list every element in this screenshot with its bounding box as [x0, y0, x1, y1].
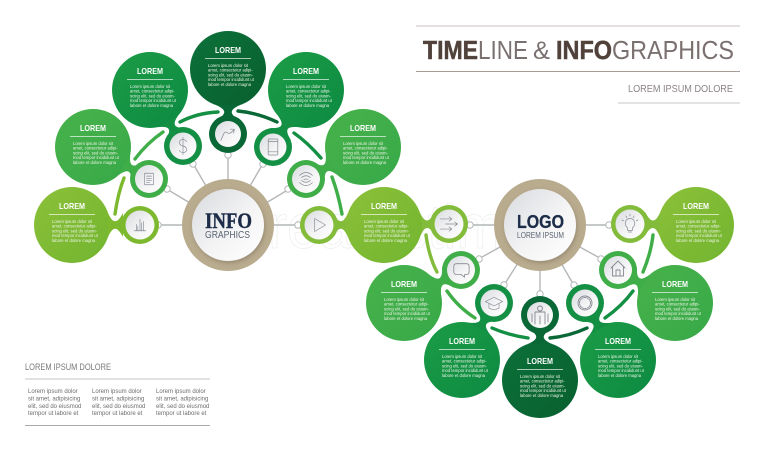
panel: left step 5 — [254, 52, 344, 166]
text block: left step 3: LOREM — [137, 66, 163, 76]
text block: left step 2: Lorem ipsum dolor sit — [73, 141, 114, 146]
text block: left step 1: scing elit, sed do eiusm- — [52, 228, 98, 233]
text block: right step 2: LOREM — [391, 279, 417, 289]
text block: bottom notes: sit amet, adipisicing — [156, 396, 208, 402]
panel: left step 6 — [287, 109, 401, 198]
text block: right step 7: LOREM — [683, 201, 709, 211]
text block: centre step 7: mod tempor incididunt ut — [364, 233, 411, 238]
text block: centre step 7: LOREM — [371, 201, 397, 211]
panel: right step 6 — [599, 251, 713, 341]
text block: right step 2: scing elit, sed do eiusm- — [384, 306, 430, 311]
text block: left step 5: labore et dolore magna — [286, 103, 330, 108]
icon: bar chart — [134, 219, 146, 231]
title: & — [533, 37, 550, 65]
text block: right step 2: labore et dolore magna — [384, 316, 428, 321]
text block: left step 1: mod tempor incididunt ut — [52, 233, 99, 238]
text block: centre step 7: labore et dolore magna — [364, 238, 408, 243]
text block: left step 3: labore et dolore magna — [130, 103, 174, 108]
text block: bottom notes: elit, sed do eiusmod — [28, 404, 81, 410]
text block: right step 6 — [652, 279, 702, 321]
panel: right step 2 — [366, 251, 480, 341]
text block: right step 7: Lorem ipsum dolor sit — [676, 219, 717, 224]
text block: left step 1 — [49, 201, 99, 243]
text block: right step 5: LOREM — [605, 336, 631, 346]
text block: right step 5: scing elit, sed do eiusm- — [598, 363, 644, 368]
text block: left step 5: LOREM — [293, 66, 319, 76]
hub: logo: LOREM IPSUM — [517, 231, 564, 240]
text block: right step 7 — [673, 201, 723, 243]
text block: right step 5: amet, consectetur adipi- — [598, 359, 643, 364]
text block: left step 6 — [340, 123, 390, 165]
text block: left step 2 — [70, 123, 120, 165]
text block: right step 4: LOREM — [527, 356, 553, 366]
text block: left step 4: labore et dolore magna — [208, 82, 252, 87]
text block: right step 2: Lorem ipsum dolor sit — [384, 297, 425, 302]
text block: left step 2: scing elit, sed do eiusm- — [73, 150, 119, 155]
text block: centre step 7: Lorem ipsum dolor sit — [364, 219, 405, 224]
text block: right step 7: amet, consectetur adipi- — [676, 224, 721, 229]
text block: right step 5: mod tempor incididunt ut — [598, 368, 645, 373]
title: LINE — [478, 35, 528, 65]
text block: left step 1: Lorem ipsum dolor sit — [52, 219, 93, 224]
text block: right step 6: Lorem ipsum dolor sit — [655, 297, 696, 302]
text block: right step 6: LOREM — [662, 279, 688, 289]
icon: smartphone — [268, 139, 278, 155]
text block: right step 3: amet, consectetur adipi- — [442, 359, 487, 364]
connector lines: info hub — [155, 152, 301, 228]
text block: right step 5: Lorem ipsum dolor sit — [598, 354, 639, 359]
text block: left step 6: labore et dolore magna — [343, 160, 387, 165]
hub: logo — [494, 179, 586, 271]
text block: bottom notes: sit amet, adipisicing — [28, 396, 80, 402]
text block: left step 5: scing elit, sed do eiusm- — [286, 93, 332, 98]
text block: bottom notes: tempor ut labore et — [156, 411, 207, 417]
text block: right step 4: scing elit, sed do eiusm- — [520, 383, 566, 388]
text block: left step 4: Lorem ipsum dolor sit — [208, 63, 249, 68]
title — [416, 26, 740, 72]
text block: left step 3: amet, consectetur adipi- — [130, 89, 175, 94]
text block: left step 2: LOREM — [80, 123, 106, 133]
icon: document — [145, 173, 153, 185]
text block: left step 6: mod tempor incididunt ut — [343, 155, 390, 160]
text block: left step 3: Lorem ipsum dolor sit — [130, 84, 171, 89]
text block: right step 6: amet, consectetur adipi- — [655, 302, 700, 307]
panel: centre step 7 — [300, 187, 468, 263]
text block: bottom notes: Lorem ipsum dolor — [156, 389, 206, 395]
text block: bottom notes: elit, sed do eiusmod — [156, 404, 209, 410]
text block: right step 4: Lorem ipsum dolor sit — [520, 374, 561, 379]
arcs: curved links between steps — [115, 111, 653, 338]
text block: left step 5: amet, consectetur adipi- — [286, 89, 331, 94]
panel: left step 1 — [34, 187, 159, 263]
text block: right step 4: labore et dolore magna — [520, 393, 564, 398]
text block: centre step 7: amet, consectetur adipi- — [364, 224, 409, 229]
text block: left step 6: scing elit, sed do eiusm- — [343, 150, 389, 155]
text block: centre step 7: scing elit, sed do eiusm- — [364, 228, 410, 233]
text block: left step 1: amet, consectetur adipi- — [52, 224, 97, 229]
title: GRAPHICS — [612, 35, 734, 65]
watermark: dreamstime — [236, 193, 536, 262]
text block: left step 4: scing elit, sed do eiusm- — [208, 72, 254, 77]
text block: right step 3: labore et dolore magna — [442, 373, 486, 378]
text block: right step 3: scing elit, sed do eiusm- — [442, 363, 488, 368]
text block: right step 4 — [517, 356, 567, 398]
text block: bottom notes — [25, 362, 210, 426]
text block: bottom notes: Lorem ipsum dolor — [28, 389, 78, 395]
hub: info graphics: INFO — [205, 208, 252, 233]
text block: left step 4 — [205, 45, 255, 87]
text block: left step 6: Lorem ipsum dolor sit — [343, 141, 384, 146]
text block: left step 5: mod tempor incididunt ut — [286, 98, 333, 103]
text block: right step 7: scing elit, sed do eiusm- — [676, 228, 722, 233]
panel: right step 5 — [566, 284, 656, 398]
text block: left step 5: Lorem ipsum dolor sit — [286, 84, 327, 89]
text block: right step 2 — [381, 279, 431, 321]
icon: people — [532, 306, 548, 324]
text block: right step 6: labore et dolore magna — [655, 316, 699, 321]
text block: right step 5 — [595, 336, 645, 378]
text block: left step 4: amet, consectetur adipi- — [208, 68, 253, 73]
panel: left step 3 — [112, 52, 202, 165]
hub: logo: LOGO — [517, 212, 564, 232]
hub: info graphics: GRAPHICS — [205, 230, 250, 241]
text block: left step 1: LOREM — [59, 201, 85, 211]
icon: dollar — [179, 137, 187, 155]
text block: right step 7: labore et dolore magna — [676, 238, 720, 243]
panel: left step 4 — [190, 31, 266, 153]
text block: right step 3: mod tempor incididunt ut — [442, 368, 489, 373]
connector lines: logo hub — [467, 222, 612, 297]
text block: left step 3 — [127, 66, 177, 108]
icon: play — [315, 219, 325, 231]
subtitle: LOREM IPSUM DOLORE — [628, 83, 733, 95]
panel: right step 4 — [502, 296, 578, 418]
icon: ring — [578, 296, 592, 310]
text block: bottom notes: tempor ut labore et — [28, 411, 79, 417]
text block: left step 6: amet, consectetur adipi- — [343, 146, 388, 151]
text block: right step 6: scing elit, sed do eiusm- — [655, 306, 701, 311]
text block: right step 7: mod tempor incididunt ut — [676, 233, 723, 238]
text block: left step 3: mod tempor incididunt ut — [130, 98, 177, 103]
text block: left step 1: labore et dolore magna — [52, 238, 96, 243]
title: TIME — [423, 35, 478, 65]
text block: right step 6: mod tempor incididunt ut — [655, 311, 702, 316]
text block: left step 2: amet, consectetur adipi- — [73, 146, 118, 151]
icon: graduation cap — [485, 297, 503, 309]
text block: left step 4: LOREM — [215, 45, 241, 55]
text block: right step 4: amet, consectetur adipi- — [520, 379, 565, 384]
text block: left step 2: mod tempor incididunt ut — [73, 155, 120, 160]
text block: bottom notes: tempor ut labore et — [92, 411, 143, 417]
text block: right step 2: mod tempor incididunt ut — [384, 311, 431, 316]
panel: left step 2 — [55, 109, 168, 198]
text block: right step 2: amet, consectetur adipi- — [384, 302, 429, 307]
text block: centre step 7 — [361, 201, 411, 243]
panel: right step 3 — [424, 284, 513, 398]
text block: bottom notes: Lorem ipsum dolor — [92, 389, 142, 395]
icon: house — [611, 261, 625, 276]
panel: right step 7 — [611, 187, 734, 263]
text block: right step 3: Lorem ipsum dolor sit — [442, 354, 483, 359]
icon: arrows — [440, 217, 458, 231]
text block: left step 5 — [283, 66, 333, 108]
subtitle — [618, 83, 740, 103]
icon: wireless signal — [300, 173, 312, 185]
title: INFO — [556, 35, 612, 65]
text block: right step 3: LOREM — [449, 336, 475, 346]
text block: bottom notes: LOREM IPSUM DOLORE — [25, 362, 111, 372]
text block: left step 6: LOREM — [350, 123, 376, 133]
text block: left step 4: mod tempor incididunt ut — [208, 77, 255, 82]
text block: right step 4: mod tempor incididunt ut — [520, 388, 567, 393]
icon: speech bubble — [454, 264, 469, 277]
icon: trend arrow — [221, 129, 234, 140]
text block: left step 2: labore et dolore magna — [73, 160, 117, 165]
text block: right step 3 — [439, 336, 489, 378]
text block: right step 5: labore et dolore magna — [598, 373, 642, 378]
text block: bottom notes: sit amet, adipisicing — [92, 396, 144, 402]
hub: info graphics — [182, 179, 274, 271]
icon: light bulb — [622, 214, 638, 232]
text block: bottom notes: elit, sed do eiusmod — [92, 404, 145, 410]
text block: left step 3: scing elit, sed do eiusm- — [130, 93, 176, 98]
